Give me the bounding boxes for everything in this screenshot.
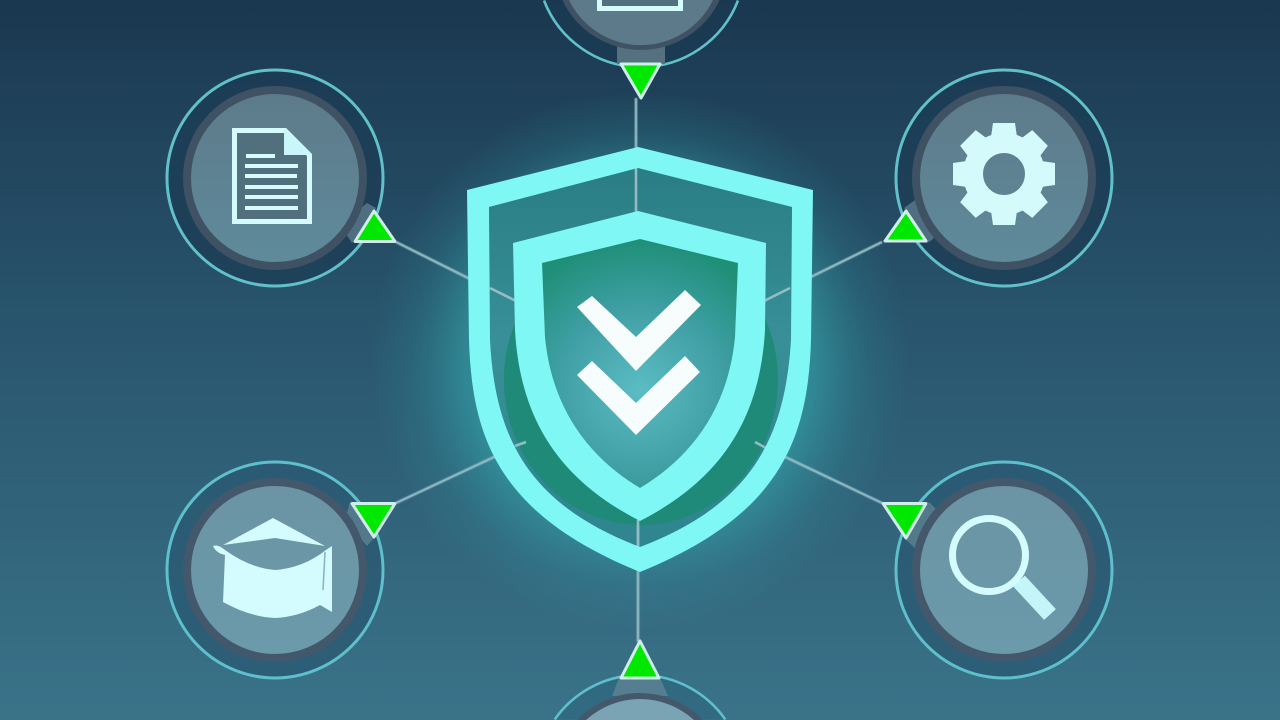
node: document	[167, 70, 395, 286]
icon: magnifying glass	[952, 518, 1050, 614]
outer shield interior	[489, 168, 792, 547]
shield	[467, 147, 813, 572]
icon: gear	[953, 123, 1055, 225]
node: graduation cap	[167, 462, 395, 678]
connector stubs over disc	[515, 442, 766, 548]
marker: green triangle	[352, 504, 395, 537]
connector stub	[617, 44, 665, 64]
connector stub	[345, 502, 374, 546]
connector stub	[904, 200, 945, 243]
connector stub	[612, 678, 668, 696]
outer shield band	[467, 147, 813, 572]
marker: green triangle	[355, 211, 395, 242]
icon: monitor	[600, 0, 680, 8]
connector segments inside outer shield	[490, 168, 790, 548]
node: magnifying glass	[883, 462, 1112, 678]
marker: green triangle	[883, 504, 926, 538]
marker: green triangle	[621, 641, 659, 678]
node: bottom, cropped	[555, 641, 725, 720]
dark green disc behind inner shield	[504, 235, 778, 525]
connector stub	[906, 502, 942, 548]
node: settings gear	[885, 70, 1112, 286]
marker: green triangle	[885, 211, 926, 241]
central glow	[370, 80, 910, 640]
icon: double chevron	[577, 290, 701, 435]
connector stub	[340, 203, 376, 243]
node: top, cropped	[544, 0, 738, 98]
inner shield band	[513, 211, 766, 521]
marker: green triangle	[621, 64, 660, 98]
inner shield interior	[542, 239, 738, 488]
connector lines	[396, 98, 882, 642]
icon: document	[234, 128, 312, 222]
icon: graduation cap	[213, 518, 332, 618]
